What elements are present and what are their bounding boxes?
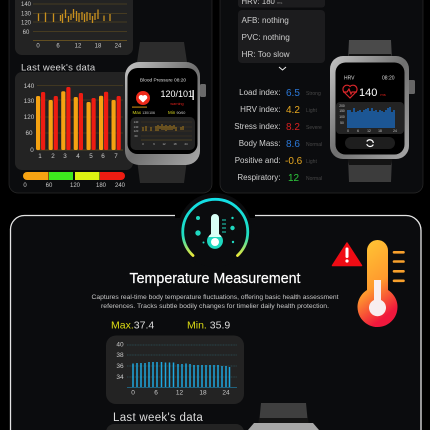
chart: daily temperature: 34 xyxy=(116,374,124,381)
chart: last week's data: 0 xyxy=(30,147,34,154)
heading: last week's data: Last week's data xyxy=(113,412,203,424)
list: health indices: Respiratory: xyxy=(237,173,280,182)
chart: daily blood pressure: 18 xyxy=(95,44,102,50)
watch: blood pressure screen: Blood Pressure 08:20 xyxy=(140,78,186,84)
watch: blood pressure screen: 0 xyxy=(142,142,144,146)
watch: blood pressure screen: 120 xyxy=(134,129,139,133)
list: health indices: Positive and: xyxy=(235,156,280,165)
chart: daily blood pressure: 0 xyxy=(36,44,40,50)
watch: HRV screen: 200 xyxy=(339,104,345,108)
legend: range colour bar: 60 xyxy=(46,183,53,189)
list: health indices: Load index: xyxy=(239,88,280,97)
watch: HRV screen: 6 xyxy=(357,129,359,133)
legend: range colour bar: 240 xyxy=(115,183,126,189)
readout: max and min temperature xyxy=(111,320,230,332)
watch: HRV screen: 24 xyxy=(393,129,397,133)
panel: HRV and indices xyxy=(220,0,423,193)
legend: range colour bar: 180 xyxy=(96,183,107,189)
watch: blood pressure screen: 120/101 xyxy=(160,89,193,99)
description xyxy=(92,294,339,310)
list: health indices: HRV index: xyxy=(240,105,280,114)
list: health indices: Strong xyxy=(306,91,321,97)
watch: blood pressure screen: 6 xyxy=(153,142,155,146)
list: health indices: Light xyxy=(306,108,317,114)
card: rhythm results: AFB: nothing xyxy=(242,16,289,25)
chart: daily temperature: 12 xyxy=(176,390,183,396)
list: health indices: Normal xyxy=(306,176,322,182)
chart: daily temperature: 0 xyxy=(131,390,135,396)
panel: blood pressure xyxy=(9,0,212,193)
chart: last week's data xyxy=(15,72,133,170)
watch: HRV screen: HRV xyxy=(344,76,355,82)
button: refresh xyxy=(345,137,395,149)
watch: HRV screen: 140 ms xyxy=(359,87,386,99)
chart: daily temperature: 38 xyxy=(116,352,124,359)
icon: heart pulse xyxy=(343,85,357,98)
watch: blood pressure screen xyxy=(125,42,206,183)
chart: last week's data: 140 xyxy=(24,83,35,90)
watch: temperature screen (cropped) xyxy=(248,403,319,430)
chart: daily temperature: 6 xyxy=(154,390,158,396)
readout: max and min temperature: Min. 35.9 xyxy=(187,320,230,332)
chart: last week's data: 5 xyxy=(89,153,93,160)
watch: blood pressure screen: 18 xyxy=(173,142,177,146)
icon: heart in red circle xyxy=(136,91,150,105)
chart: daily temperature: 36 xyxy=(116,363,124,370)
chart: daily temperature: 24 xyxy=(222,390,230,396)
chart: daily blood pressure: 6 xyxy=(56,44,60,50)
card: rhythm results xyxy=(238,10,325,63)
chart: daily blood pressure: 24 xyxy=(115,44,122,50)
chart: last week's data: 1 xyxy=(38,153,42,160)
watch: HRV screen: 18 xyxy=(378,129,382,133)
chart: last week's data: 4 xyxy=(76,153,80,160)
chart: daily blood pressure: 12 xyxy=(75,44,82,50)
watch: blood pressure screen: Min 90/60 xyxy=(168,110,185,115)
description: references. Tracks subtle bodily changes for timelier daily health protection. xyxy=(101,303,329,310)
watch: blood pressure screen: 24 xyxy=(184,142,188,146)
watch: blood pressure screen: 60 xyxy=(134,134,138,138)
panel: temperature measurement xyxy=(10,193,421,430)
chart: last week's data: 60 xyxy=(25,130,33,137)
chart: last week's data: 6 xyxy=(101,153,105,160)
list: health indices: 8.2 xyxy=(286,122,300,133)
chart: daily temperature: 18 xyxy=(199,390,207,396)
description: Captures real-time body temperature fluctuations, offering basic health assessment xyxy=(92,294,339,301)
chart: last week's data: 2 xyxy=(51,153,55,160)
icon: warning triangle xyxy=(332,243,362,266)
chart: daily temperature xyxy=(106,336,244,404)
icon: thermometer xyxy=(358,240,404,327)
watch: blood pressure screen: 130 xyxy=(134,125,139,129)
watch: blood pressure screen: warning xyxy=(170,102,184,106)
list: health indices: 12 xyxy=(288,173,300,184)
watch: HRV screen: 50 xyxy=(340,121,344,125)
list: health indices: Normal xyxy=(306,142,322,148)
watch: HRV screen: 12 xyxy=(367,129,371,133)
watch: blood pressure screen: 12 xyxy=(162,142,166,146)
watch: HRV screen: 100 xyxy=(339,115,345,119)
chart: daily temperature: 40 xyxy=(116,342,124,348)
chart: last week's data: 7 xyxy=(114,153,118,160)
legend: range colour bar: 120 xyxy=(70,183,81,189)
chart: daily blood pressure: 60 xyxy=(23,30,30,36)
list: health indices xyxy=(234,88,322,184)
chart: daily blood pressure xyxy=(15,0,133,55)
list: health indices: Stress index: xyxy=(234,122,280,131)
list: health indices: Light xyxy=(306,159,317,165)
list: health indices: 8.6 xyxy=(286,139,300,150)
list: health indices: 4.2 xyxy=(286,105,300,116)
chart: daily blood pressure: 130 xyxy=(21,12,32,18)
legend: range colour bar: 0 xyxy=(23,183,27,189)
card: HRV value xyxy=(238,0,325,8)
heading: last week's data: Last week's data xyxy=(21,62,96,74)
watch: HRV screen: 150 xyxy=(339,109,345,113)
watch: blood pressure screen: Max 130/106 xyxy=(132,110,155,115)
watch: HRV screen: 08:20 xyxy=(382,76,395,82)
chart: last week's data: 130 xyxy=(24,98,35,105)
watch: HRV screen: 0 xyxy=(347,129,349,133)
card: rhythm results: HR: Too slow xyxy=(242,50,290,59)
chart: last week's data: 120 xyxy=(24,114,35,121)
icon: chevron xyxy=(279,67,286,70)
list: health indices: Severe xyxy=(306,125,322,131)
card: rhythm results: PVC: nothing xyxy=(242,33,290,42)
chart: daily blood pressure: 140 xyxy=(21,2,32,8)
legend: range colour bar xyxy=(23,172,126,189)
list: health indices: -0.6 xyxy=(285,156,303,167)
icon: circular temperature badge xyxy=(175,193,255,267)
chart: daily blood pressure: 120 xyxy=(21,20,32,26)
chart: last week's data: 3 xyxy=(63,153,67,160)
list: health indices: Body Mass: xyxy=(239,139,280,148)
watch: HRV screen xyxy=(330,40,415,182)
watch: blood pressure screen: 140 xyxy=(134,120,139,124)
title: Temperature Measurement xyxy=(130,270,301,287)
list: health indices: 6.5 xyxy=(286,88,300,99)
chart card: last week's temperature xyxy=(106,424,244,430)
readout: max and min temperature: Max.37.4 xyxy=(111,320,154,332)
